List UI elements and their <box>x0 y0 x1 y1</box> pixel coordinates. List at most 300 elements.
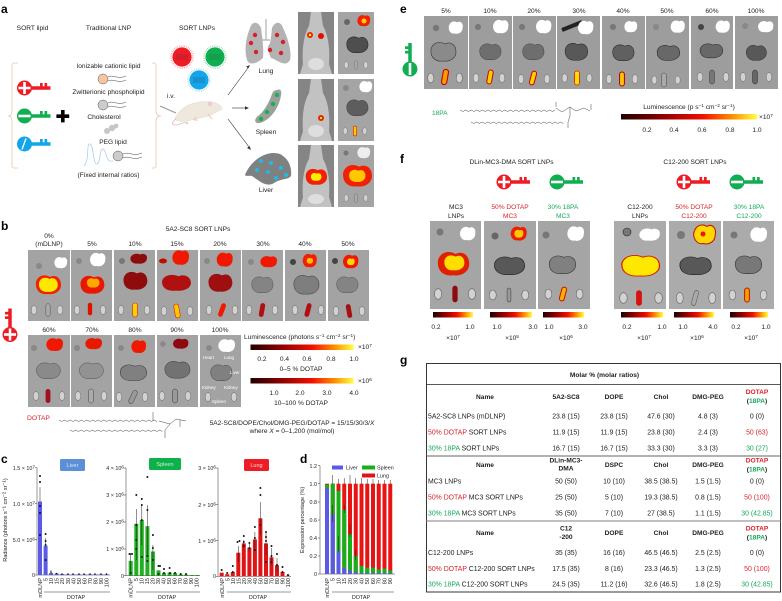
x tick labels: 15 <box>236 578 242 584</box>
image 100% with organ labels: Kidney <box>202 385 217 390</box>
x tick labels: 80 <box>382 578 388 584</box>
column labels: MC3 <box>556 213 570 220</box>
x axis group DOTAP: DOTAP <box>352 595 370 601</box>
x tick labels: 60 <box>264 578 270 584</box>
colour bars with scales: 0.2 <box>431 324 441 331</box>
x tick labels: 90 <box>99 578 105 584</box>
row: 50% DOTAP: 11.9 (15) <box>600 430 628 436</box>
column labels: LNPs <box>632 213 649 220</box>
row: 50% DOTAP <box>428 430 768 436</box>
row: 50% DOTAP C12-200: 50 (100) <box>744 566 770 573</box>
panel letter b: b <box>1 219 8 233</box>
bars <box>38 502 109 575</box>
percentage labels row 1: 10% <box>128 241 142 248</box>
x tick labels: 80 <box>184 578 190 584</box>
y axis title: −2 <box>2 491 6 497</box>
colour bars with scales: 1.0 <box>657 324 667 331</box>
row: C12-200: 35 (35) <box>555 550 577 557</box>
percentage labels row 1: 30% <box>256 241 270 248</box>
icon: blue SORT LNP <box>188 69 210 91</box>
row: 30% 18PA C12-200: 1.8 (2.5) <box>695 582 721 588</box>
heading: MC3: DLin-MC3-DMA SORT LNPs <box>469 159 554 166</box>
panel letter a: a <box>1 2 8 16</box>
label pill Lung <box>244 459 269 471</box>
panel letter c: c <box>1 452 8 466</box>
percentage labels row 1: 0% <box>44 233 54 240</box>
image 30% 18PA MC3 <box>538 221 590 309</box>
icon: lung illustration <box>246 19 291 64</box>
x tick labels: 100 <box>194 578 200 587</box>
colour bar 0-5% DOTAP: 0.2 <box>257 356 267 363</box>
image: organs liver <box>338 145 374 207</box>
colour bar 0-5% DOTAP <box>250 343 372 373</box>
row: 30% 18PA C12-200: 11.2 (16) <box>600 582 628 588</box>
icon: vertical red key <box>2 308 18 342</box>
image 100% with organ labels: Kidney <box>224 385 239 390</box>
y axis: 1 × 10 <box>106 547 121 553</box>
x tick labels: mDLNP <box>325 578 331 598</box>
chemical structure: DOTAP <box>59 412 186 438</box>
y axis: 3 × 10 <box>198 466 213 472</box>
header row 1: Name <box>476 394 494 401</box>
text: luminescence units: cm <box>324 334 336 341</box>
x tick labels: 50 <box>365 578 371 584</box>
colour bars with scales: ×10 <box>637 335 648 342</box>
table section 3 <box>428 526 773 588</box>
row: 30% 18PA MC3: 30% 18PA MC3 SORT LNPs <box>428 510 516 518</box>
icon: liver illustration <box>245 153 291 185</box>
colour bar 10-100% DOTAP: 10–100 % DOTAP <box>274 400 328 407</box>
row: mDLNP: 47.6 (30) <box>647 414 675 420</box>
colour bars with scales: 1.0 <box>465 324 475 331</box>
text: PEG lipid: PEG lipid <box>99 139 127 146</box>
x tick labels: 90 <box>388 578 394 584</box>
x axis group DOTAP: DOTAP <box>158 595 176 601</box>
row: mDLNP: 4.8 (3) <box>698 414 718 420</box>
header row 3: -200 <box>559 534 573 541</box>
icon: ionizable lipid <box>98 74 126 84</box>
colour bar 10-100% DOTAP: 4.0 <box>349 390 359 397</box>
header row 2: Name <box>476 462 494 469</box>
percentage labels: 50% <box>660 8 674 15</box>
row: 50% DOTAP: 11.9 (15) <box>552 430 580 436</box>
x tick labels: 40 <box>72 578 78 584</box>
image: mouse liver <box>298 145 334 207</box>
colour bar: ×10 <box>759 114 770 121</box>
colour bars with scales: 6 <box>570 334 573 339</box>
y axis: 0.4 <box>310 536 317 542</box>
y axis title: −1 <box>2 480 6 486</box>
label pill Liver: Liver <box>67 463 79 469</box>
icon: spleen illustration <box>255 90 281 123</box>
text: luminescence units: ) <box>353 334 355 341</box>
x tick labels: 20 <box>150 578 156 584</box>
text: DOTAP formulation: 5A2-SC8/DOPE/Chol/DMG-PEG/DOTAP = 15/15/30/3/X <box>210 420 375 427</box>
row: 50% DOTAP: 23.8 (30) <box>647 430 675 436</box>
x tick labels: 30 <box>66 578 72 584</box>
x tick labels: 15 <box>145 578 151 584</box>
percentage labels row 1: 15% <box>170 241 184 248</box>
y axis: 3 × 10 <box>106 493 121 499</box>
x tick labels: 60 <box>172 578 178 584</box>
x tick labels: 70 <box>88 578 94 584</box>
icon: blue neutral key <box>17 136 50 152</box>
text: DOTAP formulation <box>210 420 375 435</box>
percentage labels row 1 <box>35 233 355 248</box>
x tick labels: 40 <box>360 578 366 584</box>
colour bars with scales: 0.2 <box>622 324 632 331</box>
chart: lung radiance <box>198 459 292 601</box>
image 5% <box>71 250 112 321</box>
image 0% <box>28 250 70 321</box>
text: luminescence units: Luminescence (photons s <box>244 334 319 341</box>
stacked bars: liver <box>325 488 392 574</box>
x tick labels: 80 <box>94 578 100 584</box>
image: mouse lung <box>298 12 334 74</box>
table title: Molar % (molar ratios) <box>570 372 639 379</box>
image 100% <box>735 16 778 89</box>
column labels: MC3 <box>449 204 463 211</box>
x tick labels: 10 <box>231 578 237 584</box>
heading: Traditional LNP: Traditional LNP <box>86 25 132 32</box>
colour bar: 0.8 <box>725 127 735 134</box>
colour bar 0-5% DOTAP: 0.4 <box>280 356 289 363</box>
text: Ionizable cationic lipid: Ionizable cationic lipid <box>76 63 141 70</box>
colour bar: 1.0 <box>752 127 762 134</box>
x tick labels <box>220 578 292 598</box>
row: MC3: 0 (0) <box>750 478 764 486</box>
chart: liver radiance <box>2 459 110 601</box>
row: 50% DOTAP C12-200 <box>428 566 770 573</box>
y axis <box>13 464 110 579</box>
stacked bars: lung <box>325 484 392 574</box>
arrow to spleen <box>232 106 249 110</box>
x tick labels: 50 <box>77 578 83 584</box>
text: DOTAP: DOTAP <box>27 415 50 422</box>
right brace <box>152 63 161 168</box>
row: 50% DOTAP C12-200: 17.5 (35) <box>552 566 580 573</box>
row: MC3: 10 (10) <box>603 478 625 486</box>
y axis title: ) <box>3 478 9 480</box>
icon: vertical green key <box>402 43 418 76</box>
x tick labels: 20 <box>348 578 354 584</box>
y axis title: cm <box>3 497 9 506</box>
colour bars with scales: 0.2 <box>731 324 741 331</box>
y axis: 0 <box>213 574 216 580</box>
image 40% <box>285 250 326 321</box>
image 70% <box>71 335 112 407</box>
x tick labels <box>128 578 200 598</box>
row: 50% DOTAP: 50% DOTAP SORT LNPs <box>428 430 507 436</box>
left brace <box>8 63 18 168</box>
x tick labels: 100 <box>286 578 292 587</box>
text: Cholesterol: Cholesterol <box>87 114 121 121</box>
icon: mouse with syringe <box>160 102 222 125</box>
y axis: 1 × 10 <box>198 539 213 545</box>
y axis title: Expression percentage (%) <box>300 487 306 553</box>
colour bars with scales: ×10 <box>690 335 701 342</box>
percentage labels row 2: 60% <box>42 327 56 334</box>
text: luminescence units: −1 <box>699 103 704 108</box>
x tick labels: 10 <box>49 578 55 584</box>
text: luminescence units: sr <box>720 104 728 111</box>
column labels: C12-200 <box>736 213 762 220</box>
header row 3: DOTAP <box>746 526 769 532</box>
y axis: 0 <box>314 572 317 578</box>
percentage labels: 100% <box>748 8 765 15</box>
x tick labels: 90 <box>189 578 195 584</box>
colour bar 0-5% DOTAP: 0–5 % DOTAP <box>280 366 323 373</box>
x axis group DOTAP <box>332 592 394 601</box>
row: C12-200: 46.5 (46.5) <box>644 550 678 557</box>
row: 30% 18PA C12-200 <box>428 582 773 588</box>
header row 2: DMG-PEG <box>692 462 724 469</box>
header row 3: C12 <box>560 526 572 532</box>
colour bars with scales: 7 <box>457 334 460 339</box>
y axis <box>106 464 200 580</box>
percentage labels row 2: 100% <box>212 327 229 334</box>
y axis: 1.0 <box>310 482 317 488</box>
header row 3: (18PA) <box>747 534 767 542</box>
error bars <box>333 475 390 560</box>
x tick labels: 60 <box>371 578 377 584</box>
legend <box>332 466 394 480</box>
x tick labels: 30 <box>156 578 162 584</box>
y axis: 6 <box>121 546 124 550</box>
chemical structure: 18PA <box>460 102 591 128</box>
image 90% <box>157 335 198 407</box>
text: luminescence units: sr <box>340 334 349 341</box>
column labels: 50% DOTAP <box>491 204 529 211</box>
row: MC3 <box>428 478 764 486</box>
row: 30% 18PA: 30 (27) <box>746 446 768 452</box>
stacked bars: spleen <box>325 484 392 574</box>
image 20% <box>200 250 241 321</box>
x tick labels: 5 <box>134 578 140 581</box>
text: luminescence units: −1 <box>319 333 325 338</box>
image 60% <box>28 335 70 407</box>
colour bars with scales: ×10 <box>446 335 457 342</box>
x tick labels: 5 <box>226 578 232 581</box>
percentage labels row 2: 70% <box>85 327 99 334</box>
x tick labels: 70 <box>270 578 276 584</box>
row: C12-200: C12-200 LNPs <box>428 550 474 557</box>
row: 30% 18PA MC3 <box>428 510 773 518</box>
x tick labels: 50 <box>167 578 173 584</box>
x tick labels: 15 <box>54 578 60 584</box>
colour bars with scales: ×10 <box>744 335 755 342</box>
text: DOTAP formulation: where X = 0–1,200 (mol/mol) <box>249 428 334 435</box>
y axis: 6 <box>32 536 35 542</box>
x tick labels: 30 <box>354 578 360 584</box>
x tick labels: 10 <box>336 578 342 584</box>
row: mDLNP: 0 (0) <box>750 414 764 420</box>
y axis title: −1 <box>2 505 6 511</box>
colour bar 10-100% DOTAP: 6 <box>369 377 372 382</box>
y axis: 1.0 × 10 <box>13 502 32 508</box>
panel d: expression percentage stacked bars <box>300 452 395 601</box>
y axis: 0 <box>32 573 35 579</box>
row: MC3: 1.5 (1.5) <box>695 478 721 486</box>
x tick labels: mDLNP <box>128 578 134 598</box>
column labels: LNPs <box>448 213 465 220</box>
error bars and data points <box>221 487 289 576</box>
row: 50% DOTAP MC3 <box>428 494 770 502</box>
image 15% <box>157 250 198 321</box>
header row 2: (18PA) <box>747 466 767 474</box>
image MC3 LNPs <box>430 221 481 309</box>
image 50% <box>646 16 689 89</box>
image 40% <box>602 16 645 89</box>
row: 30% 18PA C12-200: 30 (42.85) <box>741 582 773 588</box>
icon: red SORT LNP <box>171 46 193 68</box>
bars <box>129 520 199 576</box>
image: mouse spleen <box>298 79 334 141</box>
header row 3: DOPE <box>605 530 624 537</box>
image 100% with organ labels: Heart <box>203 355 215 360</box>
panel a: SORT strategy schematic <box>1 2 374 207</box>
row: MC3: 38.5 (38.5) <box>644 478 678 486</box>
percentage labels: 40% <box>616 8 630 15</box>
icon: red cationic key <box>17 80 50 96</box>
image 50% DOTAP MC3 <box>484 221 536 309</box>
error bars and data points <box>39 475 107 575</box>
text: luminescence units: −1 <box>727 103 733 108</box>
label pill Spleen <box>149 458 181 470</box>
header row 3 <box>476 526 769 542</box>
text: fixed internal ratios: (Fixed internal ratios) <box>78 172 139 179</box>
colour bar 10-100% DOTAP: 1.0 <box>269 390 279 397</box>
colour bar 10-100% DOTAP <box>250 377 372 407</box>
column labels: 30% 18PA <box>734 204 765 211</box>
percentage labels row 1: 50% <box>341 241 355 248</box>
text: 18PA: 18PA <box>432 110 448 117</box>
text: luminescence units: −2 <box>335 333 341 338</box>
image 10% <box>469 16 512 89</box>
row: 50% DOTAP MC3: 25 (50) <box>555 494 577 502</box>
x tick labels: 10 <box>140 578 146 584</box>
y axis: 4 × 10 <box>106 466 121 472</box>
panel b: DOTAP dose imaging <box>1 219 375 438</box>
x tick labels: 30 <box>248 578 254 584</box>
y axis: 1.2 <box>310 464 317 470</box>
panel g: molar ratio table <box>400 353 780 592</box>
row: C12-200: 16 (16) <box>603 550 625 557</box>
text: luminescence units: Luminescence (p s <box>643 104 699 111</box>
panel letter e: e <box>400 2 407 16</box>
row: 30% 18PA C12-200: 24.5 (35) <box>552 582 580 588</box>
row: 50% DOTAP MC3: 0.8 (1.5) <box>695 494 721 502</box>
icon: PEG lipid <box>84 144 142 166</box>
row: 50% DOTAP MC3: 50 (100) <box>744 494 770 502</box>
legend: Lung <box>377 474 389 480</box>
image 80% <box>114 335 155 407</box>
row: mDLNP <box>428 414 764 420</box>
y axis title: sr <box>3 485 9 492</box>
y axis: 0.8 <box>310 500 317 506</box>
header row 1 <box>476 389 769 405</box>
header row 2: DSPC <box>605 462 623 469</box>
row: 30% 18PA MC3: 7 (10) <box>605 510 623 518</box>
y axis <box>198 464 291 580</box>
colour bars with scales: 1.0 <box>761 324 771 331</box>
image 20% <box>513 16 556 89</box>
arrow to lung <box>228 65 250 95</box>
y axis title: Radiance (photons s <box>3 511 9 562</box>
y axis: 6 <box>121 464 124 470</box>
column labels: C12-200 <box>627 204 653 211</box>
row: C12-200 <box>428 550 764 557</box>
header row 3: DMG-PEG <box>692 530 724 537</box>
x axis group DOTAP: DOTAP <box>249 595 267 601</box>
x tick labels: 60 <box>82 578 88 584</box>
label pill Liver <box>60 459 85 471</box>
label pill Lung: Lung <box>250 463 263 469</box>
panel c: radiance bar charts <box>1 452 292 601</box>
colour bar 0-5% DOTAP: 1.0 <box>349 356 359 363</box>
x tick labels: 5 <box>44 578 50 581</box>
row: 50% DOTAP: 2.4 (3) <box>698 430 718 436</box>
column labels <box>448 204 765 220</box>
y axis: 5.0 × 10 <box>13 538 32 544</box>
colour bars with scales: ×10 <box>559 335 570 342</box>
colour bars with scales: 1.0 <box>678 324 688 331</box>
text: Lung: Lung <box>259 68 274 75</box>
colour bar 0-5% DOTAP: 0.8 <box>326 356 336 363</box>
row: 50% DOTAP C12-200: 50% DOTAP C12-200 SORT LNPs <box>428 566 535 573</box>
panel f: other ionizable lipids <box>400 152 774 342</box>
panel letter f: f <box>400 152 405 166</box>
x tick labels: 15 <box>342 578 348 584</box>
plus sign <box>56 110 69 122</box>
bars <box>220 518 290 576</box>
column labels: 30% 18PA <box>548 204 579 211</box>
row: 30% 18PA C12-200: 30% 18PA C12-200 SORT LNPs <box>428 582 528 588</box>
row: mDLNP: 23.8 (15) <box>552 414 580 420</box>
y axis <box>310 464 395 578</box>
x axis group DOTAP: DOTAP <box>67 595 85 601</box>
colour bars with scales: 3.0 <box>578 324 588 331</box>
image 60% <box>691 16 733 89</box>
icon: red key C12-200 <box>676 174 710 190</box>
colour bars with scales: 7 <box>755 334 758 339</box>
chart: spleen radiance <box>106 458 200 601</box>
header row 2: Chol <box>654 462 668 469</box>
x tick labels: 40 <box>253 578 259 584</box>
colour bars with scales: 5 <box>516 334 519 339</box>
icon: green anionic key <box>17 108 50 124</box>
row: 50% DOTAP C12-200: 23.3 (46.5) <box>644 566 678 573</box>
percentage labels: 60% <box>705 8 719 15</box>
y axis: 2 × 10 <box>106 520 121 526</box>
label pill Spleen: Spleen <box>156 462 174 468</box>
y axis: 2 × 10 <box>198 503 213 509</box>
colour bar 0-5% DOTAP: 0.6 <box>302 356 312 363</box>
image 100% with organ labels: Lung <box>224 355 235 360</box>
row: 30% 18PA: 16.7 (15) <box>552 446 580 452</box>
y axis: 7 <box>32 464 35 470</box>
row: MC3: MC3 LNPs <box>428 478 462 486</box>
header row 3: Chol <box>654 530 668 537</box>
percentage labels row 2 <box>42 327 229 334</box>
text: luminescence units: cm <box>704 104 715 111</box>
x axis group DOTAP <box>227 592 291 601</box>
image 50% <box>328 250 369 321</box>
y axis: 0.6 <box>310 518 317 524</box>
colour bar: 0.4 <box>669 127 679 134</box>
row: 30% 18PA: 30% 18PA SORT LNPs <box>428 446 500 452</box>
y axis: 6 <box>121 492 124 496</box>
